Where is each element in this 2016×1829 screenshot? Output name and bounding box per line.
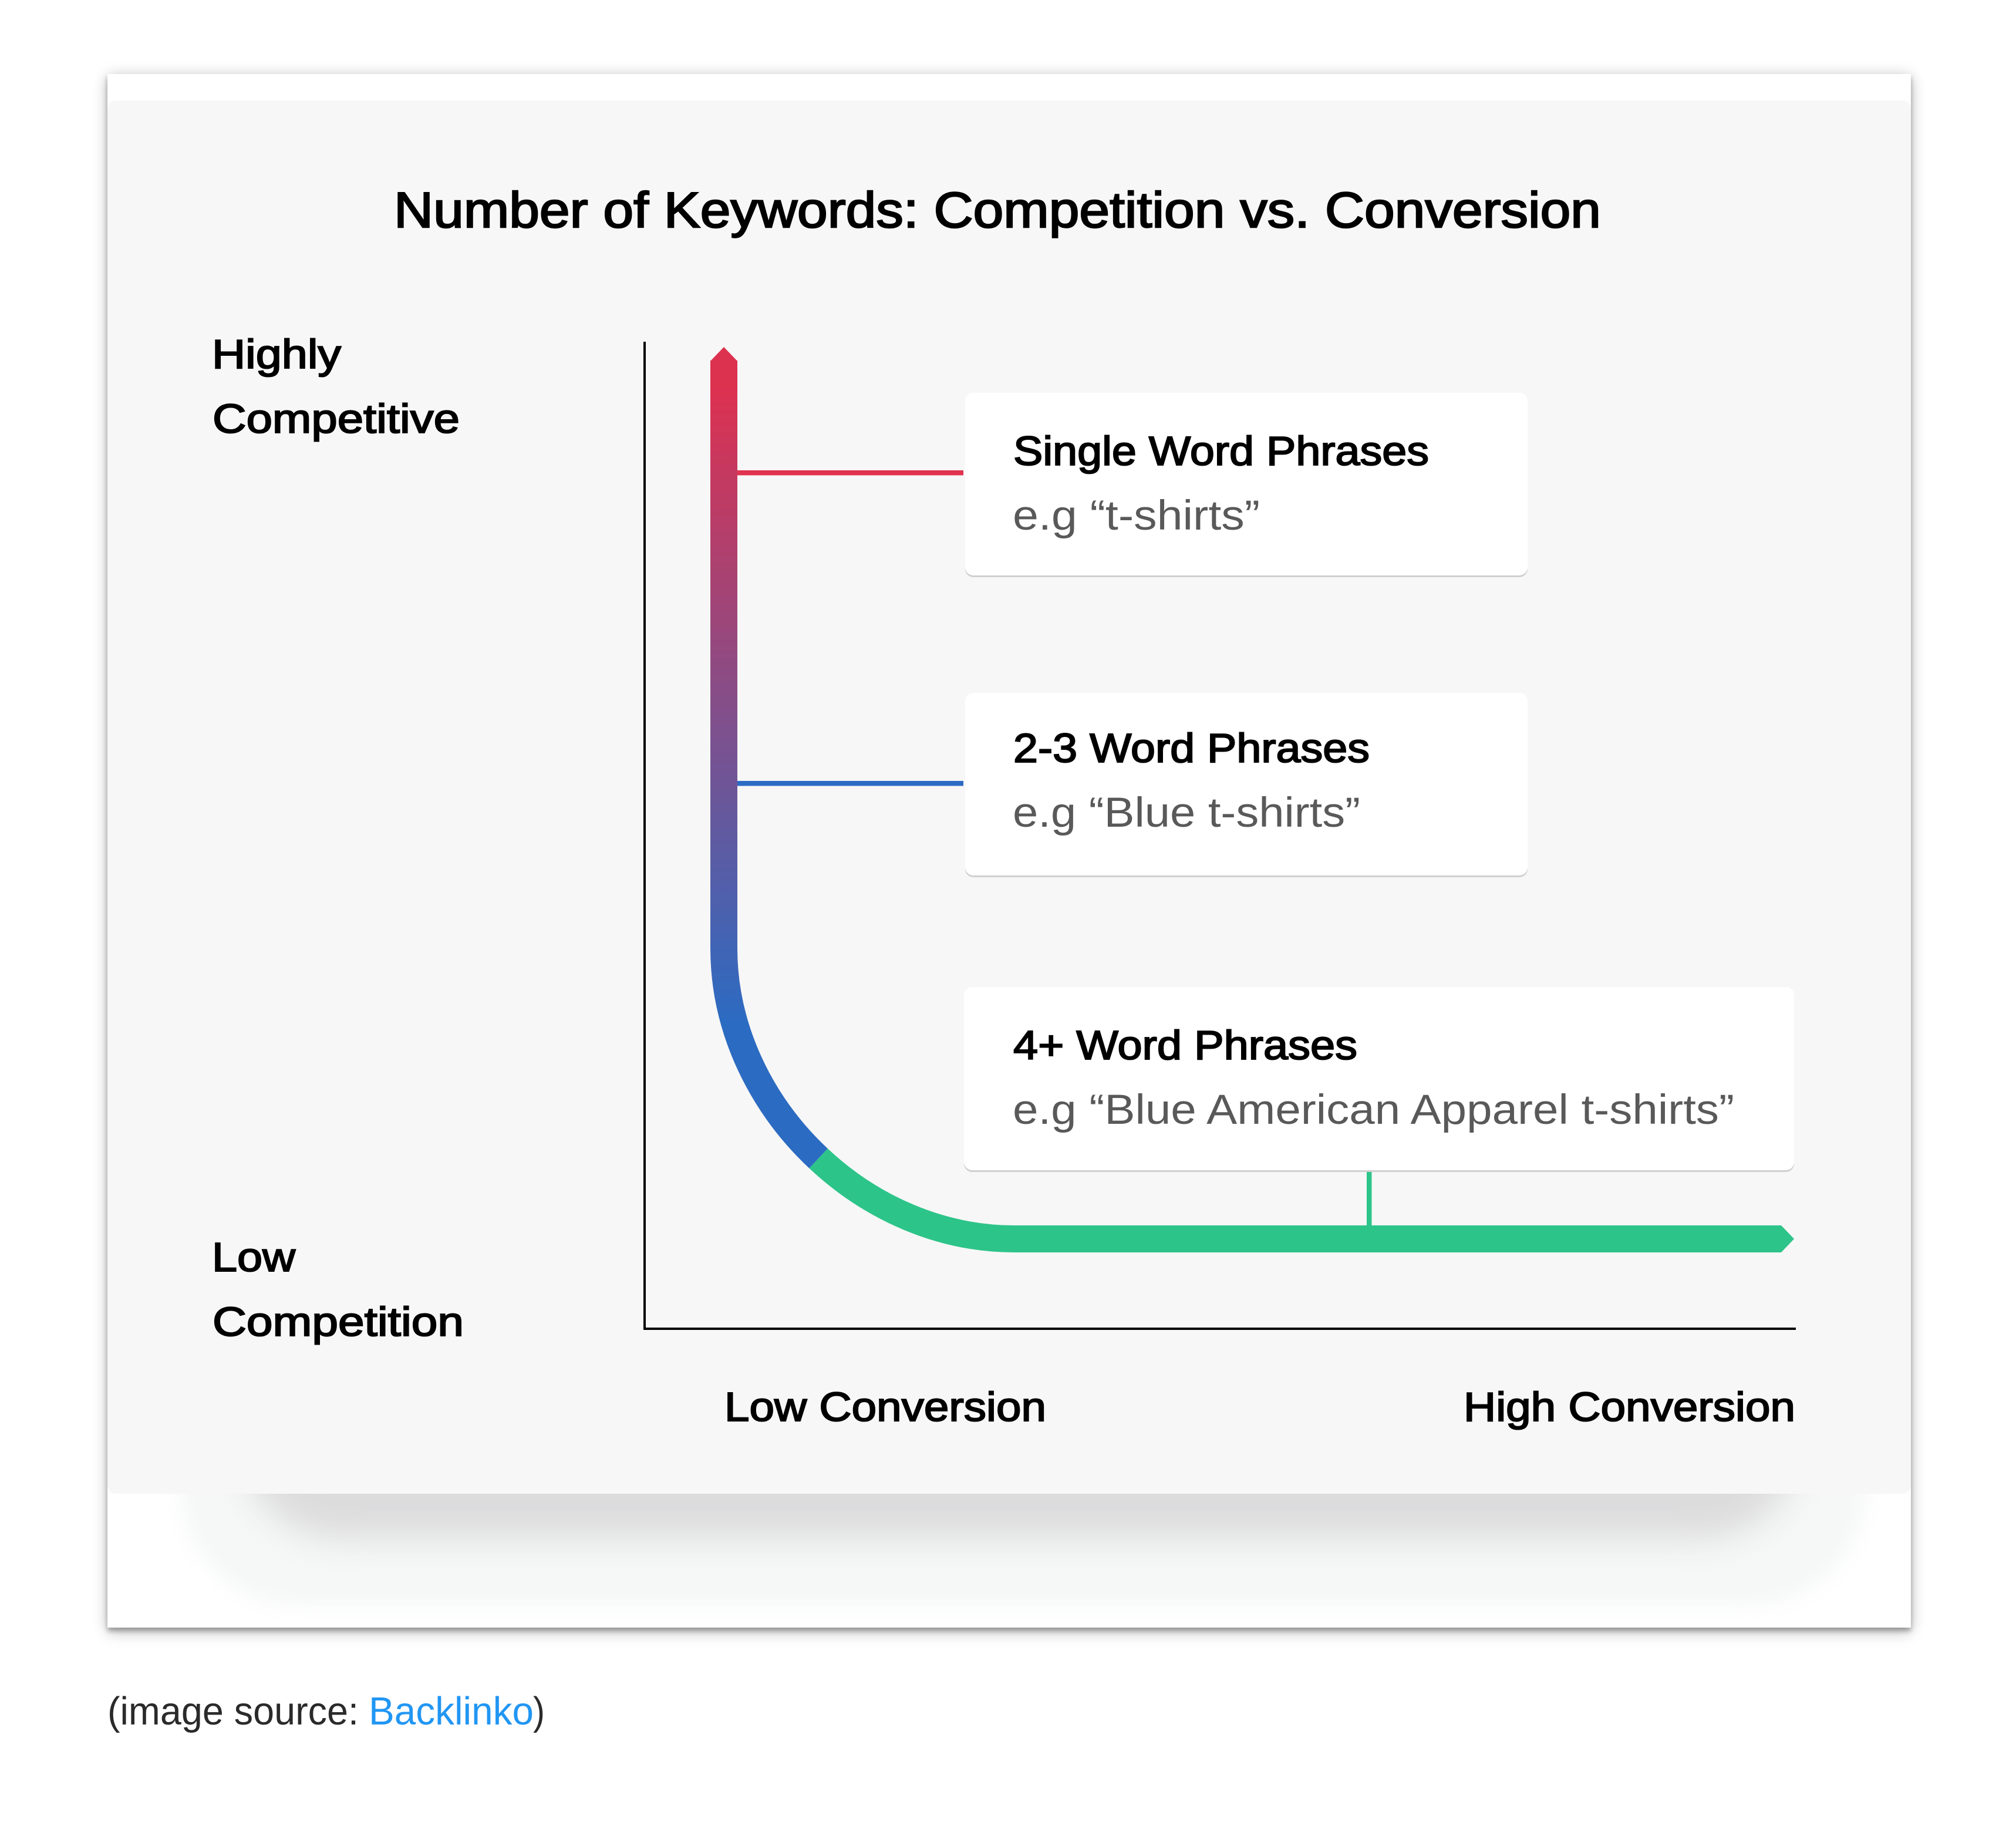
y-axis label: highly competitive bbox=[212, 331, 460, 442]
white card with drop shadow bbox=[107, 74, 1911, 1628]
chart axes bbox=[643, 342, 1796, 1330]
long-tail curve green section with arrow bbox=[818, 1158, 1794, 1252]
y-axis label: low competition bbox=[212, 1234, 464, 1345]
title: Number of Keywords: Competition vs. Conversion bbox=[394, 183, 1601, 238]
y-axis label: highly competitive: Competitive bbox=[213, 396, 460, 442]
card: single word phrases: Single Word Phrases bbox=[1013, 428, 1429, 474]
card: 2-3 word phrases bbox=[965, 693, 1528, 877]
image source caption: Backlinko bbox=[369, 1689, 534, 1733]
card: single word phrases bbox=[965, 393, 1528, 577]
card: 4+ word phrases: e.g “Blue American Apparel t-shirts” bbox=[1013, 1087, 1734, 1133]
card: 4+ word phrases bbox=[964, 987, 1794, 1172]
card: 2-3 word phrases: 2-3 Word Phrases bbox=[1013, 725, 1370, 771]
connector: 4+ word phrases bbox=[1367, 1170, 1371, 1227]
y-axis label: highly competitive: Highly bbox=[212, 331, 341, 377]
image source caption: ) bbox=[533, 1689, 545, 1733]
card: single word phrases: e.g “t-shirts” bbox=[1013, 493, 1260, 539]
connector: single word phrases bbox=[737, 470, 963, 476]
soft shadow beneath the grey panel bbox=[193, 1494, 1853, 1594]
x-axis label: high conversion: High Conversion bbox=[1464, 1384, 1795, 1430]
y-axis label: low competition: Low bbox=[212, 1234, 295, 1280]
y-axis label: low competition: Competition bbox=[213, 1299, 464, 1345]
connector: 2-3 word phrases bbox=[737, 781, 963, 786]
card: 2-3 word phrases: e.g “Blue t-shirts” bbox=[1013, 790, 1360, 836]
x-axis label: low conversion: Low Conversion bbox=[724, 1384, 1046, 1430]
long-tail curve red to blue section with arrow bbox=[710, 347, 818, 1158]
image source caption bbox=[107, 1689, 545, 1733]
image source caption: (image source: bbox=[107, 1689, 359, 1733]
panel: grey chart background bbox=[107, 100, 1911, 1494]
card: 4+ word phrases: 4+ Word Phrases bbox=[1013, 1022, 1357, 1068]
